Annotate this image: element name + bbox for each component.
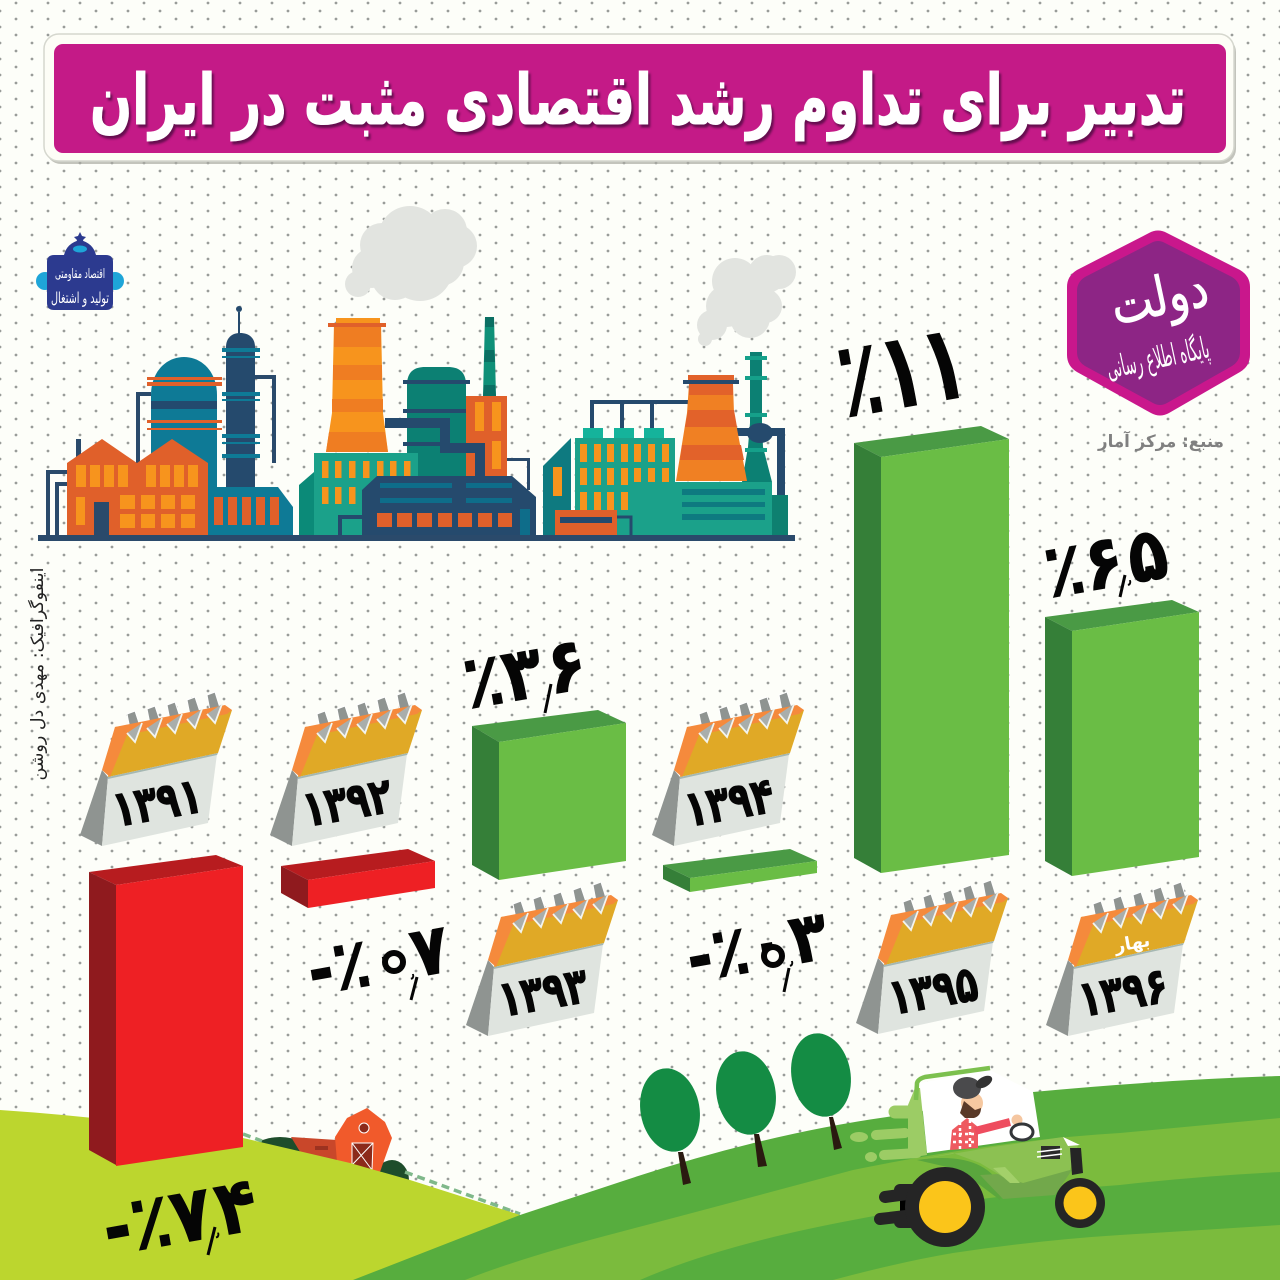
- tree 1: [634, 1064, 706, 1185]
- front wheel: [1055, 1178, 1105, 1228]
- bar 1393 positive: [472, 710, 626, 880]
- light green band: [465, 1118, 1280, 1280]
- cabin window: [920, 1070, 1040, 1153]
- value minus 7.4 percent: -٪۷٫۴: [96, 1160, 264, 1274]
- fender: [917, 1158, 1003, 1200]
- barn and bushes: [250, 1108, 409, 1200]
- logo: economy badge: تولید و اشتغال: [51, 289, 109, 307]
- smoke cloud right: [697, 255, 796, 346]
- bar 1392 negative: [281, 849, 435, 908]
- dashed road: [243, 1134, 520, 1214]
- rear wheel: [905, 1167, 985, 1247]
- rear tail: [880, 1190, 915, 1222]
- value minus 0.3 percent: -٪۰٫۳: [680, 895, 834, 999]
- calendar 1392: ۱۳۹۲: [298, 767, 397, 839]
- calendar 1393: [466, 882, 618, 1036]
- source note: منبع: مرکز آمار: [1097, 430, 1224, 452]
- calendar 1396 spring: [1046, 882, 1198, 1036]
- logo: economy badge: اقتصاد مقاومتی: [55, 267, 105, 282]
- farmer: [950, 1073, 1033, 1150]
- logo: dolat hexagon: دولت: [1105, 256, 1214, 338]
- front axle post: [1070, 1148, 1083, 1175]
- title banner: [44, 34, 1236, 164]
- bar 1395 positive: [854, 426, 1009, 873]
- calendar 1393: ۱۳۹۳: [494, 957, 593, 1029]
- calendar 1391: [80, 692, 232, 846]
- bar 1394 small: [663, 849, 817, 892]
- hood: [917, 1137, 1078, 1183]
- value 3.6 percent: ٪۳٫۶: [457, 621, 593, 727]
- calendar 1394: ۱۳۹۴: [680, 767, 778, 839]
- ground line: [38, 535, 795, 541]
- center plant: [299, 317, 536, 535]
- headlight: [1063, 1137, 1080, 1146]
- calendar 1391: ۱۳۹۱: [108, 767, 206, 839]
- calendar 1395: [856, 880, 1008, 1034]
- tree 2: [710, 1047, 782, 1167]
- green hill: [353, 1076, 1280, 1280]
- speed trails: [850, 1112, 917, 1162]
- designer credit: اینفوگرافیک: مهدی دل روشن: [27, 568, 48, 780]
- calendar 1392: [270, 692, 422, 846]
- grill: [1037, 1146, 1062, 1159]
- lime hill: [0, 1110, 540, 1280]
- right plant: [543, 352, 788, 535]
- value 6.5 percent: ٪۶٫۵: [1038, 510, 1174, 616]
- smoke cloud left: [345, 206, 477, 301]
- lower light band: [833, 1225, 1280, 1280]
- tree 3: [785, 1029, 857, 1150]
- value 11 percent: ٪۱۱: [828, 300, 975, 443]
- tractor with farmer: [850, 1068, 1105, 1247]
- bar 1391 negative: [89, 855, 243, 1166]
- logo: dolat hexagon: [1067, 230, 1250, 416]
- hills: [0, 1076, 1280, 1280]
- bar 1396 positive: [1045, 600, 1199, 876]
- value minus 0.7 percent: -٪۰٫۷: [301, 908, 455, 1012]
- left refinery: [48, 306, 293, 535]
- calendar 1394: [652, 692, 804, 846]
- calendar 1395: ۱۳۹۵: [884, 955, 982, 1027]
- calendar 1396 spring: ۱۳۹۶: [1074, 957, 1172, 1029]
- bar chart: [89, 426, 1199, 1166]
- factory illustration: [38, 206, 796, 541]
- trees: [634, 1029, 857, 1185]
- calendar 1396 spring: بهار: [1112, 930, 1152, 957]
- logo: economy badge: [36, 232, 124, 310]
